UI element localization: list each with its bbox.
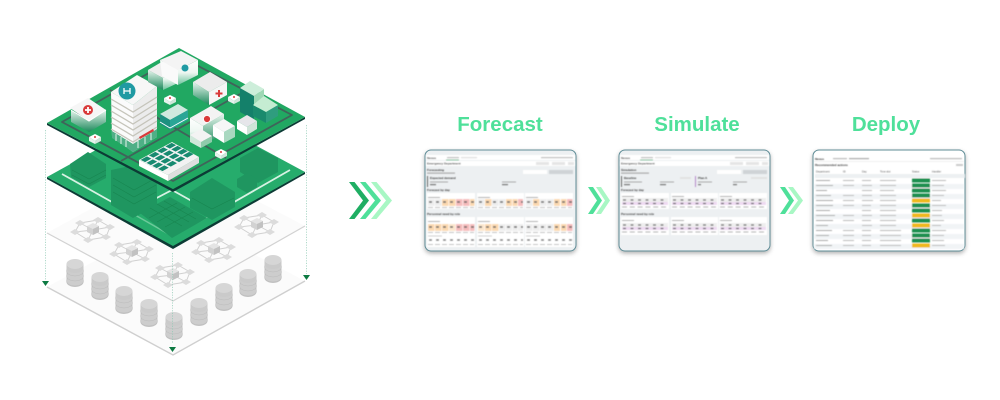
panel: simulate dashboard screenshot: Emergency Department (621, 162, 655, 166)
building: warehouse (139, 142, 199, 181)
status cells (912, 178, 930, 248)
panel: forecast dashboard screenshot: Forecasting (427, 168, 444, 172)
panel: forecast dashboard screenshot: Personnel need by role (427, 212, 460, 216)
building: central hospital (190, 106, 235, 148)
building: small teal shop (160, 104, 188, 130)
panel: deploy table screenshot: ID (843, 170, 846, 174)
building: tall tower (111, 75, 157, 152)
ambulances (89, 94, 240, 159)
panel: forecast dashboard screenshot: Forecast by day (427, 188, 450, 192)
panel: deploy table screenshot: Department (816, 170, 830, 174)
panel: forecast dashboard screenshot: Expected demand (430, 176, 456, 180)
building: back complex (148, 51, 198, 90)
panel: simulate dashboard screenshot: Forecast by day (621, 188, 644, 192)
building: glass green clinic (240, 81, 278, 123)
dotted connector lines with arrowheads (42, 125, 310, 352)
panel: simulate dashboard screenshot: Simulation (621, 168, 637, 172)
panel: simulate dashboard screenshot: Nexus (621, 156, 630, 160)
panel: deploy table screenshot: Handler (932, 170, 941, 174)
panel: deploy table screenshot: Recommended actions (815, 163, 848, 167)
building: small hospital (70, 98, 106, 132)
panel: deploy table screenshot: Nexus (815, 157, 824, 161)
layer: network plate (47, 160, 305, 301)
database cylinders (66, 255, 282, 340)
ghost buildings (70, 148, 278, 238)
panel: deploy table screenshot: Day (862, 170, 867, 174)
building: clinic with red cross (193, 72, 227, 105)
table rows (814, 184, 964, 249)
heading: Deploy: Deploy (852, 113, 921, 136)
panel: forecast dashboard screenshot: Nexus (427, 156, 436, 160)
panel: forecast dashboard screenshot: Emergency Department (427, 162, 461, 166)
panel: simulate dashboard screenshot: Plan A (698, 176, 708, 180)
roads (62, 56, 292, 181)
arrow: large triple chevron (349, 182, 392, 219)
panel: forecast dashboard screenshot (425, 150, 576, 251)
panel: simulate dashboard screenshot: Personnel need by role (621, 212, 654, 216)
heading: Simulate: Simulate (654, 113, 740, 136)
panel: deploy table screenshot: Status (912, 170, 920, 174)
layer: data storage plate (47, 215, 305, 355)
arrow: small chevron to deploy (780, 187, 803, 214)
panel: deploy table screenshot: Time slot (880, 170, 891, 174)
isometric layer stack (42, 48, 310, 355)
heading: Forecast: Forecast (457, 113, 543, 136)
arrow: small chevron to simulate (588, 187, 610, 214)
panel: simulate dashboard screenshot (619, 150, 770, 251)
network hubs (70, 212, 279, 288)
building: small grey pavilion (237, 115, 257, 135)
layer: digital twin green plate (47, 104, 305, 249)
panel: simulate dashboard screenshot: Baseline (624, 176, 637, 180)
layer: hospital city plate (47, 48, 305, 192)
panel: deploy table screenshot (813, 150, 965, 251)
